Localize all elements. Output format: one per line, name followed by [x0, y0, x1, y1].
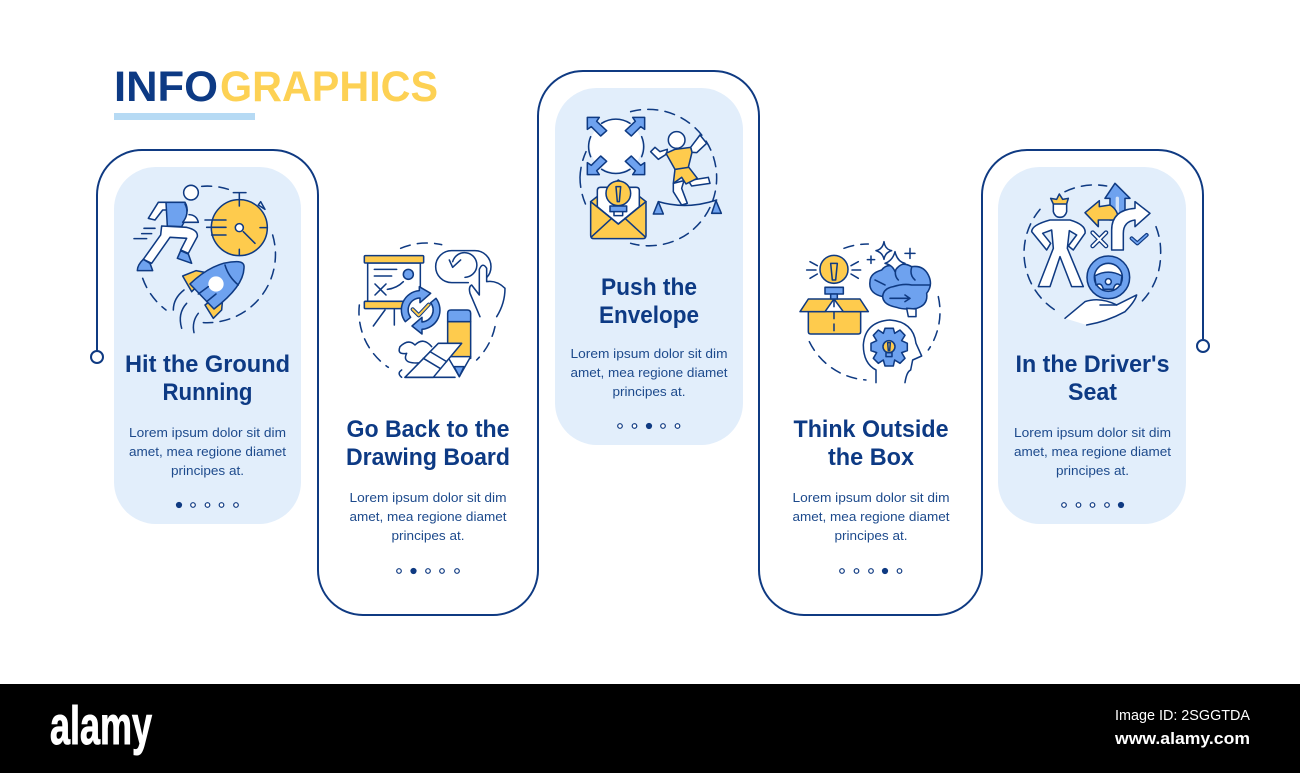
title: GRAPHICS: [220, 63, 438, 111]
text: card 2: amet, mea regione diamet: [350, 509, 507, 524]
text: card 3: principes at.: [612, 384, 686, 399]
text: card 1: [125, 351, 290, 478]
text: card 4: the Box: [828, 444, 915, 471]
connecting outline: [91, 71, 1209, 615]
text: card 3: Envelope: [599, 302, 699, 329]
text: card 1: Running: [162, 379, 252, 406]
text: card 5: [1014, 351, 1171, 478]
text: card 2: [346, 416, 510, 543]
text: card 2: Go Back to the: [346, 416, 510, 443]
text: card 4: [792, 416, 950, 543]
icon: whiteboard, undo and pencil: [359, 243, 505, 377]
footer bar: www.alamy.com: [1114, 729, 1250, 748]
panel: filled card 1: [114, 167, 301, 524]
text: card 4: Lorem ipsum dolor sit dim: [792, 490, 950, 505]
text: card 5: Lorem ipsum dolor sit dim: [1014, 425, 1171, 440]
text: card 2: principes at.: [392, 528, 464, 543]
text: card 1: Lorem ipsum dolor sit dim: [129, 425, 286, 440]
text: card 5: In the Driver's: [1016, 351, 1170, 378]
icon: bulb in a box, brain and head with gear: [800, 242, 940, 383]
pagination dots: card 3: [618, 424, 680, 428]
text: card 5: Seat: [1068, 379, 1117, 406]
panel: filled card 5: [998, 167, 1186, 524]
text: card 4: Think Outside: [794, 416, 948, 443]
icon: runner, stopwatch and rocket: [134, 185, 275, 333]
text: card 2: Drawing Board: [346, 444, 510, 471]
footer bar: Image ID: 2SGGTDA: [1115, 707, 1250, 724]
text: card 3: Push the: [601, 274, 697, 301]
text: card 4: principes at.: [834, 528, 908, 543]
panel: filled card 3: [555, 88, 743, 445]
icon: crowned figure, direction arrows, steering wheel and hand: [1024, 183, 1161, 325]
title: [114, 63, 438, 120]
text: card 4: amet, mea regione diamet: [792, 509, 950, 524]
text: card 3: [570, 274, 728, 399]
pagination dots: card 5: [1062, 502, 1124, 508]
text: card 5: principes at.: [1056, 463, 1129, 478]
text: card 3: Lorem ipsum dolor sit dim: [570, 346, 728, 361]
text: card 3: amet, mea regione diamet: [570, 365, 728, 380]
footer bar: [0, 684, 1300, 773]
title: INFO: [114, 63, 218, 111]
text: card 1: amet, mea regione diamet: [129, 444, 286, 459]
text: card 5: amet, mea regione diamet: [1014, 444, 1171, 459]
footer bar: alamy: [50, 696, 152, 756]
text: card 1: Hit the Ground: [125, 351, 290, 378]
text: card 1: principes at.: [171, 463, 244, 478]
pagination dots: card 2: [397, 568, 459, 574]
text: card 2: Lorem ipsum dolor sit dim: [350, 490, 506, 505]
pagination dots: card 1: [176, 502, 238, 508]
pagination dots: card 4: [840, 568, 902, 574]
icon: expand arrows, balance walker and envelope: [580, 109, 721, 246]
